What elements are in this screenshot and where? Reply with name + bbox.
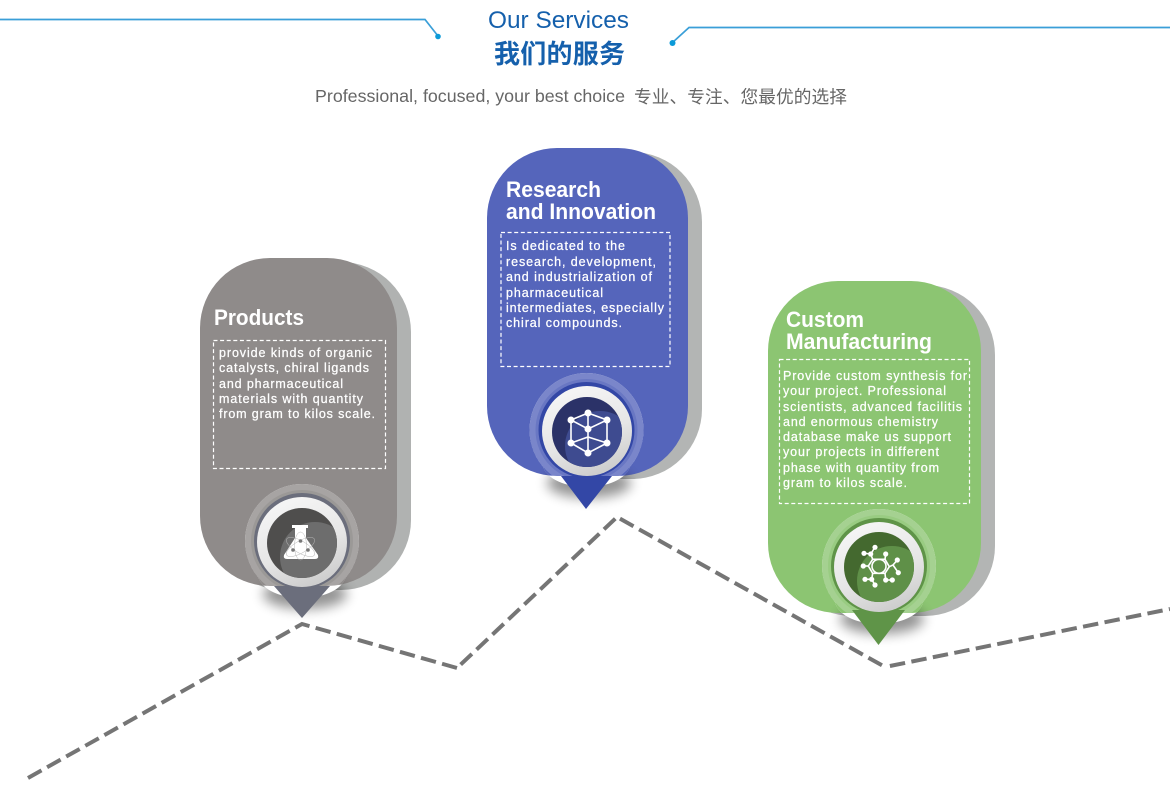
panel: research and innovation [487, 148, 702, 509]
header connector: right [670, 28, 1170, 46]
text block: products: materials with quantity [219, 392, 364, 406]
icon: molecule [861, 545, 901, 588]
text block: products: catalysts, chiral ligands [219, 361, 369, 375]
panel: custom manufacturing [768, 281, 995, 645]
card: research [487, 148, 688, 476]
title: english: Our Services [488, 7, 629, 34]
card: products [200, 258, 397, 586]
subtitle [315, 86, 847, 107]
heading: research: Research [506, 177, 601, 202]
heading: custom: Custom [786, 307, 864, 332]
text block: custom: your projects in different [783, 445, 940, 459]
text block: custom: gram to kilos scale. [783, 476, 907, 490]
text block: custom [783, 369, 967, 490]
dashed text box: research [501, 232, 670, 366]
dashed text box: products [214, 340, 386, 468]
text block: research: intermediates, especially [506, 301, 665, 315]
text block: products: from gram to kilos scale. [219, 407, 375, 421]
text block: custom: Provide custom synthesis for [783, 369, 967, 383]
dashed trend line [28, 517, 1170, 778]
subtitle: Professional, focused, your best choice [315, 86, 625, 106]
pin: research [530, 373, 644, 509]
icon: cube [568, 410, 610, 456]
heading: custom [786, 307, 932, 354]
heading: research [506, 177, 656, 224]
text block: research: pharmaceutical [506, 286, 603, 300]
heading: custom: Manufacturing [786, 329, 932, 354]
text block: custom: and enormous chemistry [783, 415, 939, 429]
subtitle: 专业、专注、您最优的选择 [634, 87, 847, 107]
text block: products: provide kinds of organic [219, 346, 372, 360]
text block: research: chiral compounds. [506, 316, 622, 330]
pin: products [245, 484, 359, 618]
text block: products: and pharmaceutical [219, 377, 343, 391]
title: chinese: 我们的服务 [494, 39, 625, 69]
text block: research: research, development, [506, 255, 656, 269]
header connector: left [0, 20, 441, 39]
card: custom [768, 281, 981, 613]
text block: custom: your project. Professional [783, 384, 946, 398]
text block: research: and industrialization of [506, 270, 653, 284]
text block: research: Is dedicated to the [506, 239, 625, 253]
text block: products [219, 346, 375, 421]
text block: custom: scientists, advanced facilitis [783, 400, 962, 414]
heading: research: and Innovation [506, 199, 656, 224]
text block: research [506, 239, 665, 330]
heading: products: Products [214, 305, 304, 330]
panel: products [200, 258, 411, 618]
icon: flask [284, 525, 318, 560]
text block: custom: database make us support [783, 430, 952, 444]
pin: custom [822, 509, 936, 645]
text block: custom: phase with quantity from [783, 461, 939, 475]
dashed text box: custom [780, 360, 970, 504]
